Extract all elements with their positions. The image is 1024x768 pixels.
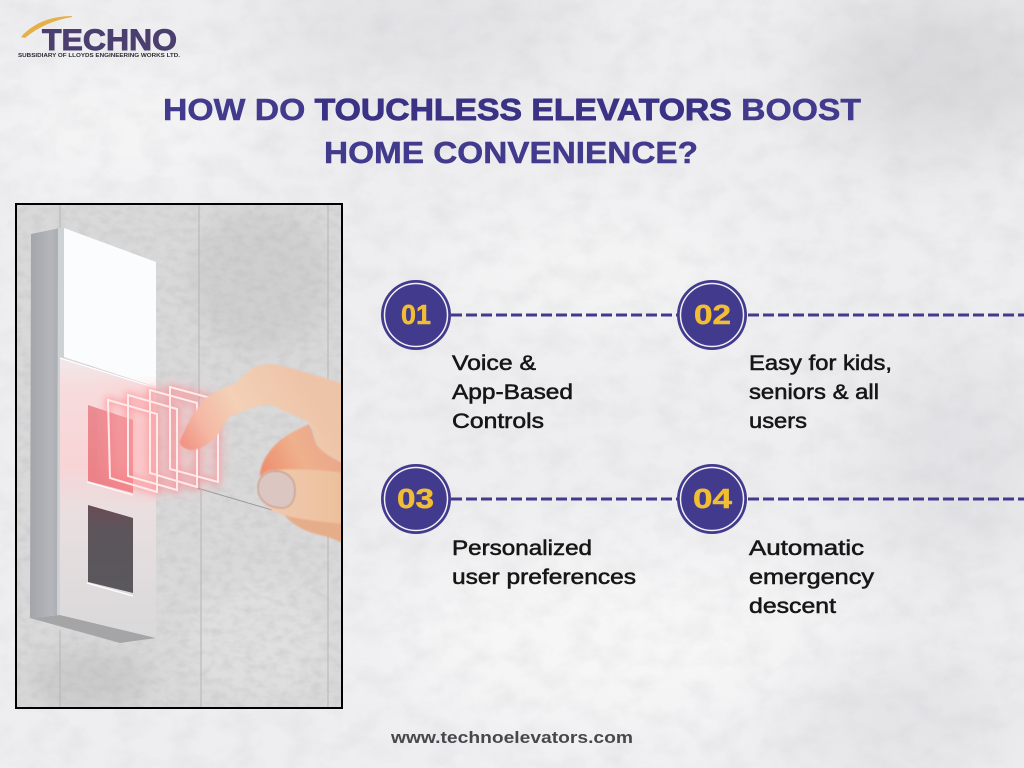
label: [749, 537, 875, 618]
label: Controls: [452, 410, 544, 433]
panel underside: [30, 615, 156, 643]
concrete wall: [17, 205, 341, 710]
hand: thumb: [257, 469, 345, 524]
logo wordmark: TECHNO: [42, 24, 177, 57]
step 04: automatic emergency descent: [677, 464, 1024, 618]
dashed connector: [451, 498, 680, 500]
title: [163, 92, 861, 170]
hand: curled middle finger: [260, 424, 345, 480]
glow behind neon frames: [108, 387, 218, 492]
label: Voice &: [452, 352, 536, 375]
label: descent: [749, 595, 836, 618]
neon touch frames: [108, 387, 218, 492]
dashed connector: [748, 498, 1024, 500]
label: [452, 352, 573, 433]
number badge: 03: [397, 483, 434, 514]
title: HOW DO TOUCHLESS ELEVATORS BOOST: [163, 92, 861, 127]
hand: thumbnail: [258, 471, 295, 508]
label: Personalized: [452, 537, 592, 560]
step 03: personalized preferences: [381, 464, 680, 589]
number badge: [677, 464, 747, 534]
label: user preferences: [452, 566, 636, 589]
panel side edge: [30, 228, 60, 618]
step 01: voice and app controls: [381, 280, 680, 433]
logo tagline: SUBSIDIARY OF LLOYDS ENGINEERING WORKS LTD.: [18, 53, 180, 59]
number badge: 04: [693, 483, 733, 514]
label: Easy for kids,: [749, 352, 892, 375]
hand: lower palm: [284, 514, 341, 543]
label: [749, 352, 892, 433]
number badge: [381, 280, 451, 350]
label: Automatic: [749, 537, 864, 560]
label: seniors & all: [749, 381, 879, 404]
label: App-Based: [452, 381, 573, 404]
panel upper white screen: [64, 228, 156, 387]
hand: [180, 364, 345, 544]
logo: Techno: [18, 16, 180, 59]
label: users: [749, 410, 807, 433]
number badge: 01: [401, 299, 431, 330]
number badge: 02: [694, 299, 731, 330]
dashed connector: [451, 314, 680, 316]
logo swoosh: [21, 16, 72, 38]
photo: hand near touchless elevator panel: [15, 203, 345, 710]
hand: index finger and back of hand: [180, 364, 345, 470]
dashed connector: [748, 314, 1024, 316]
step 02: easy for all users: [677, 280, 1024, 433]
label: emergency: [749, 566, 875, 589]
website url: www.technoelevators.com: [390, 728, 633, 747]
label: [452, 537, 636, 589]
number badge: [677, 280, 747, 350]
number badge: [381, 464, 451, 534]
title: HOME CONVENIENCE?: [324, 135, 698, 170]
panel lower plate: [60, 358, 156, 638]
dark window: [88, 505, 133, 593]
lit red window: [88, 405, 133, 493]
